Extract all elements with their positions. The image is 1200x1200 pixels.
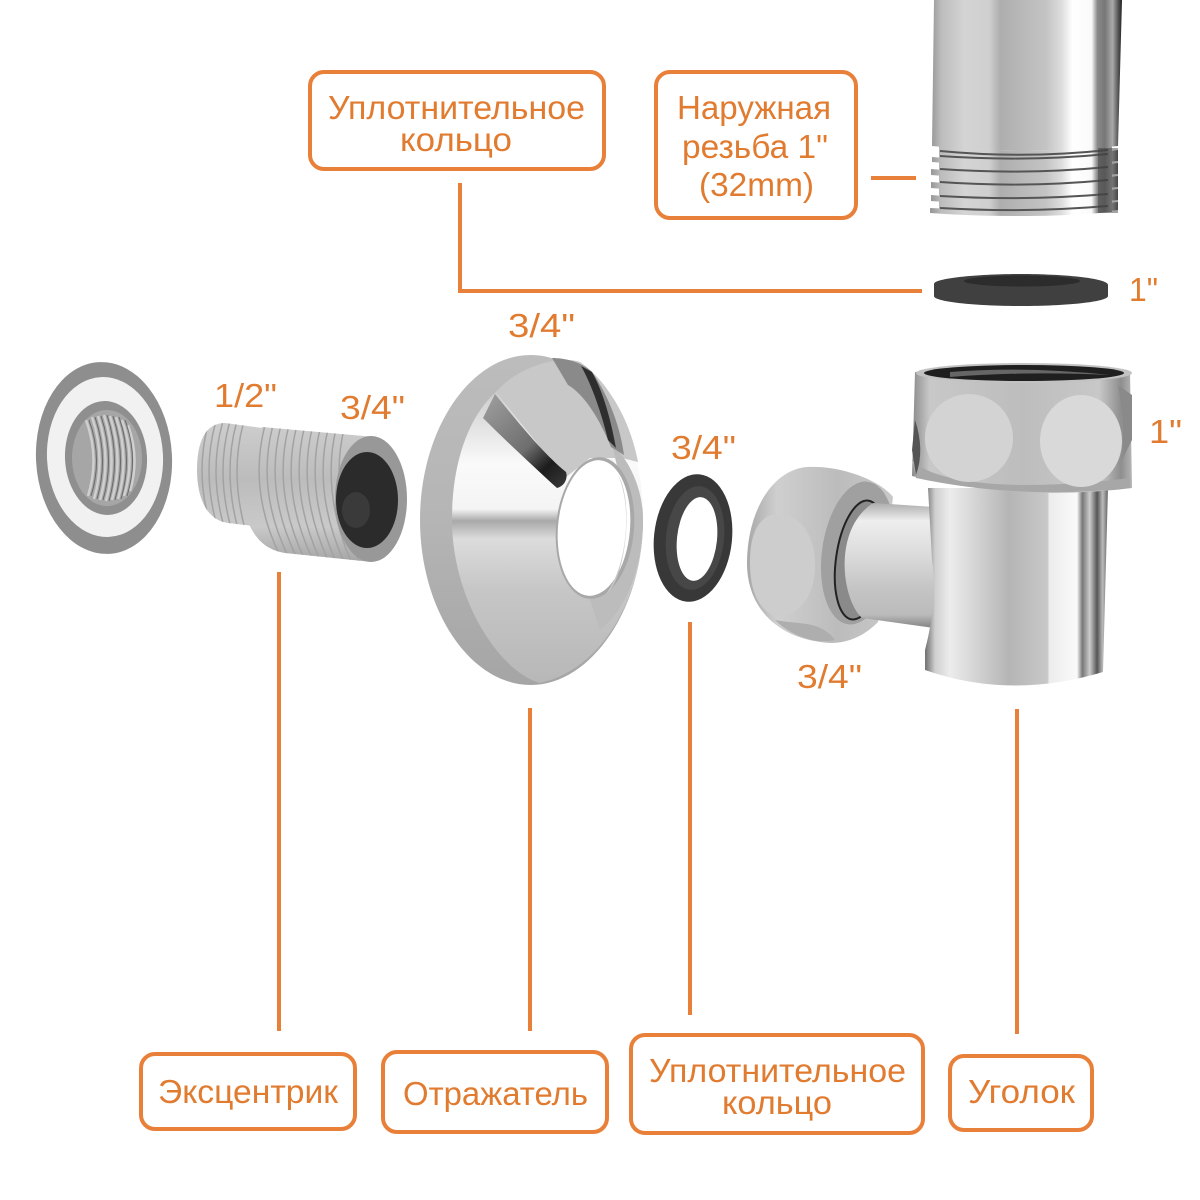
callout: top sealing ring [310, 72, 604, 169]
leader line: corner [1015, 709, 1019, 1034]
small threaded end [197, 423, 262, 527]
callout: eccentric: Эксцентрик [158, 1073, 339, 1110]
union nut [747, 467, 893, 643]
side pipe [845, 503, 934, 628]
callout: top sealing ring: кольцо [400, 121, 512, 158]
size labels: 1" [1149, 413, 1182, 450]
part: rubber washer 3/4 [648, 470, 738, 606]
callout: top sealing ring: Уплотнительное [328, 89, 585, 126]
upper right dark reflection [552, 358, 624, 455]
external thread [930, 146, 1118, 216]
callout: external thread: Наружная [677, 89, 831, 126]
part: wall socket flange [31, 359, 177, 557]
right side of cone [590, 445, 643, 630]
part: top rubber washer [934, 274, 1108, 306]
callout: bottom sealing ring: кольцо [722, 1084, 832, 1121]
hex flats [925, 394, 1013, 482]
callout: eccentric [141, 1054, 355, 1129]
left dark reflection [483, 394, 567, 488]
callout: bottom sealing ring [631, 1035, 923, 1133]
part: eccentric adapter [197, 421, 407, 564]
cone surface [452, 360, 643, 683]
callout: reflector: Отражатель [403, 1075, 588, 1112]
leader line: reflector [528, 708, 532, 1031]
size labels [214, 271, 1182, 695]
callout: external thread: (32mm) [699, 166, 814, 203]
reflector rim [420, 355, 643, 685]
flange inner ring [62, 399, 150, 517]
flange face [43, 374, 167, 540]
large threaded body [248, 427, 375, 562]
size labels: 3/4" [671, 429, 736, 466]
callout: corner: Уголок [968, 1073, 1076, 1110]
size labels: 1/2" [214, 377, 277, 414]
size labels: 3/4" [797, 658, 862, 695]
leader line: eccentric [277, 572, 281, 1031]
callout: reflector [383, 1052, 607, 1132]
callout: bottom sealing ring: Уплотнительное [649, 1052, 906, 1089]
callout: corner [950, 1056, 1092, 1130]
vertical body [925, 488, 1108, 686]
collar [812, 477, 904, 629]
part: corner fitting [747, 363, 1132, 686]
union nut flat [750, 514, 815, 616]
size labels: 1" [1129, 271, 1158, 308]
size labels: 3/4" [340, 389, 405, 426]
pipe body [932, 0, 1122, 151]
internal thread [86, 415, 135, 501]
callout: external thread [656, 72, 856, 218]
hex collar [912, 365, 1132, 493]
flange rim [31, 359, 177, 557]
size labels: 3/4" [508, 307, 575, 344]
part: cone reflector [420, 355, 643, 685]
leader line: bottom sealing ring [688, 622, 692, 1015]
leader line: top sealing ring [460, 183, 922, 291]
part: threaded pipe [930, 0, 1122, 216]
upper cone segment [496, 361, 638, 478]
callout: external thread: резьба 1" [682, 128, 828, 165]
centre hole [550, 454, 640, 602]
opening [916, 363, 1132, 383]
open end rim [335, 436, 407, 562]
leader line: external thread [871, 176, 916, 180]
